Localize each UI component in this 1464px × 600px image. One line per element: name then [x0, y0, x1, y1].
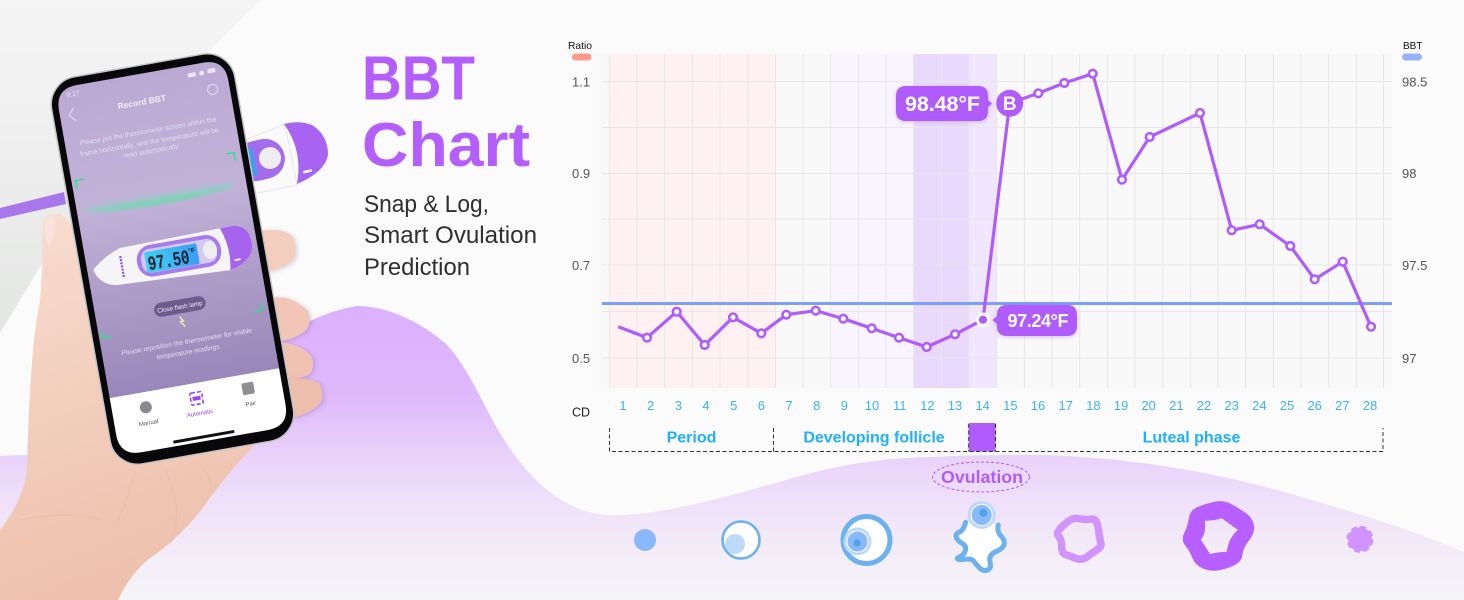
cycle day labels: 26: [1307, 398, 1322, 413]
subtitle: Smart Ovulation: [364, 222, 537, 249]
right axis labels: [1402, 74, 1427, 366]
thermometer white body: [235, 124, 297, 195]
finger 1: [255, 230, 295, 272]
status bar time: 9:27: [66, 90, 81, 99]
hand holding the phone: [0, 214, 322, 600]
title: Chart: [362, 111, 530, 180]
right axis labels: 98.5: [1402, 74, 1427, 90]
status icons: [187, 68, 216, 78]
legend: BBT: [1402, 41, 1422, 60]
palm and wrist: [0, 214, 300, 600]
subtitle: [364, 191, 537, 281]
background: lilac wave: [0, 306, 1464, 600]
legend: ratio: Ratio: [568, 41, 592, 52]
brand mark: [120, 256, 124, 278]
phone screen: [55, 59, 289, 456]
callout 98.48°F: 98.48°F: [905, 92, 980, 116]
phase band: fertile: [913, 54, 969, 388]
cycle day labels: 4: [702, 398, 710, 413]
back chevron: [68, 108, 76, 122]
fingernail: [44, 216, 55, 247]
left axis labels: 0.5: [572, 351, 590, 366]
legend: ratio: [568, 41, 592, 60]
cycle day labels: 19: [1114, 398, 1128, 413]
home bar: [173, 430, 235, 444]
finger 3: [275, 342, 313, 379]
corpus luteum small: [1058, 518, 1101, 559]
instruction text: read automatically: [123, 143, 180, 160]
cycle day labels: 17: [1058, 398, 1073, 413]
reposition text: temperature readings: [156, 343, 221, 361]
cycle day labels: 28: [1363, 398, 1377, 413]
ovulation marker block: [969, 423, 996, 452]
callout 98.48°F: [896, 86, 992, 121]
phase band: period: [610, 54, 776, 388]
callout 97.24°F: [992, 305, 1077, 336]
cycle day labels: 11: [893, 398, 906, 413]
follicle stage 2: [722, 522, 760, 558]
title: BBT: [362, 44, 475, 114]
corpus luteum large: [1183, 501, 1254, 571]
cycle day labels: 7: [785, 398, 793, 413]
palm creases: [20, 465, 211, 545]
legend: BBT: BBT: [1403, 41, 1422, 52]
tab: automatic: Automatic: [186, 409, 214, 419]
B marker: [996, 90, 1023, 117]
phase label: luteal phase: Luteal phase: [1143, 430, 1240, 446]
phase band: follicle: [830, 54, 913, 388]
cycle day labels: 21: [1169, 398, 1184, 413]
LCD reading: 97.50: [146, 247, 192, 277]
flash lamp pill: [153, 295, 207, 318]
thermometer minus mark: [303, 169, 312, 174]
right axis labels: 97.5: [1402, 258, 1427, 273]
phase brackets: [610, 424, 1383, 452]
B marker: B: [1003, 94, 1017, 115]
cycle day labels: 12: [920, 398, 935, 413]
tab: pair: [241, 381, 257, 409]
phase label: developing follicle: Developing follicle: [803, 430, 945, 446]
cycle day labels: 24: [1252, 398, 1267, 413]
left axis labels: 1.1: [572, 74, 590, 90]
ovulating follicle: [956, 501, 1004, 571]
cycle day labels: 6: [758, 398, 765, 413]
plot background: [593, 54, 1392, 388]
cycle day labels: 27: [1335, 398, 1350, 413]
BBT line: [618, 74, 1371, 347]
degree symbol: °F: [188, 246, 196, 255]
screen title: Record BBT: [117, 93, 168, 111]
cycle day labels: 18: [1086, 398, 1101, 413]
right axis labels: 97: [1402, 351, 1416, 366]
power button: [202, 240, 218, 260]
minus mark: [234, 258, 241, 261]
tab: pair: Pair: [245, 401, 257, 408]
phase label: period: Period: [667, 430, 716, 446]
low point marker: [977, 314, 989, 325]
cycle day labels: [619, 398, 1377, 413]
cycle day labels: 5: [730, 398, 737, 413]
data markers: [643, 70, 1375, 351]
green scan brackets: [75, 153, 263, 338]
cycle day labels: 23: [1224, 398, 1239, 413]
instruction text: Please put the thermometer screen within the: [79, 116, 217, 147]
subtitle: Snap & Log,: [364, 191, 489, 218]
instruction text: frame horizontally, and the temperature will be: [80, 127, 220, 158]
flash lamp pill: Close flash lamp: [157, 300, 204, 315]
thermometer button: [259, 147, 281, 169]
cycle day labels: 8: [813, 398, 820, 413]
phase band: ovulation day: [969, 54, 997, 388]
tab: automatic: [183, 390, 214, 419]
chart: [568, 41, 1427, 452]
ovulation label: [932, 462, 1030, 492]
thermometer probe: [0, 192, 66, 219]
follicle stage 1: [634, 529, 656, 551]
cycle day labels: 2: [647, 398, 654, 413]
finger 2: [270, 297, 310, 342]
phone: [47, 49, 298, 469]
left axis labels: 0.7: [572, 258, 590, 273]
tab: manual: Manual: [139, 419, 159, 428]
corpus albicans: [1348, 527, 1372, 551]
cycle day labels: 22: [1197, 398, 1211, 413]
cycle day labels: 25: [1280, 398, 1294, 413]
title: [362, 44, 530, 180]
reposition text: Please reposition the thermometer for visible: [121, 327, 253, 357]
cycle day labels: 16: [1031, 398, 1045, 413]
left axis labels: [572, 74, 590, 366]
background: grey corner shape: [0, 0, 262, 333]
thermometer LCD sliver: [243, 147, 258, 177]
cycle day labels: 10: [865, 398, 879, 413]
cycle day labels: 3: [675, 398, 682, 413]
right axis labels: 98: [1402, 166, 1416, 181]
flash icon: [180, 316, 185, 327]
cycle day labels: 15: [1003, 398, 1018, 413]
finger 4: [285, 379, 322, 418]
phone body: [47, 49, 298, 469]
instruction text: [78, 116, 221, 167]
cover line: [602, 302, 1392, 305]
CD label: CD: [572, 406, 590, 420]
thermometer behind the phone: [0, 122, 328, 219]
tab: manual: [135, 400, 159, 428]
cycle day labels: 1: [619, 398, 627, 413]
cycle day labels: 14: [975, 398, 990, 413]
help icon: [207, 84, 218, 95]
ovulation label: Ovulation: [941, 467, 1023, 487]
app tab bar: [110, 368, 289, 456]
subtitle: Prediction: [364, 254, 470, 281]
left axis labels: 0.9: [572, 166, 590, 181]
cycle day labels: 9: [841, 398, 848, 413]
cycle day labels: 13: [948, 398, 962, 413]
thermometer display frame: [231, 135, 289, 185]
thermometer cap: [284, 122, 328, 184]
green scan glow: [83, 178, 237, 217]
callout 97.24°F: 97.24°F: [1008, 311, 1068, 331]
follicle stage 3: [843, 516, 890, 564]
thermometer on screen: [90, 223, 256, 294]
cycle day labels: 20: [1141, 398, 1156, 413]
